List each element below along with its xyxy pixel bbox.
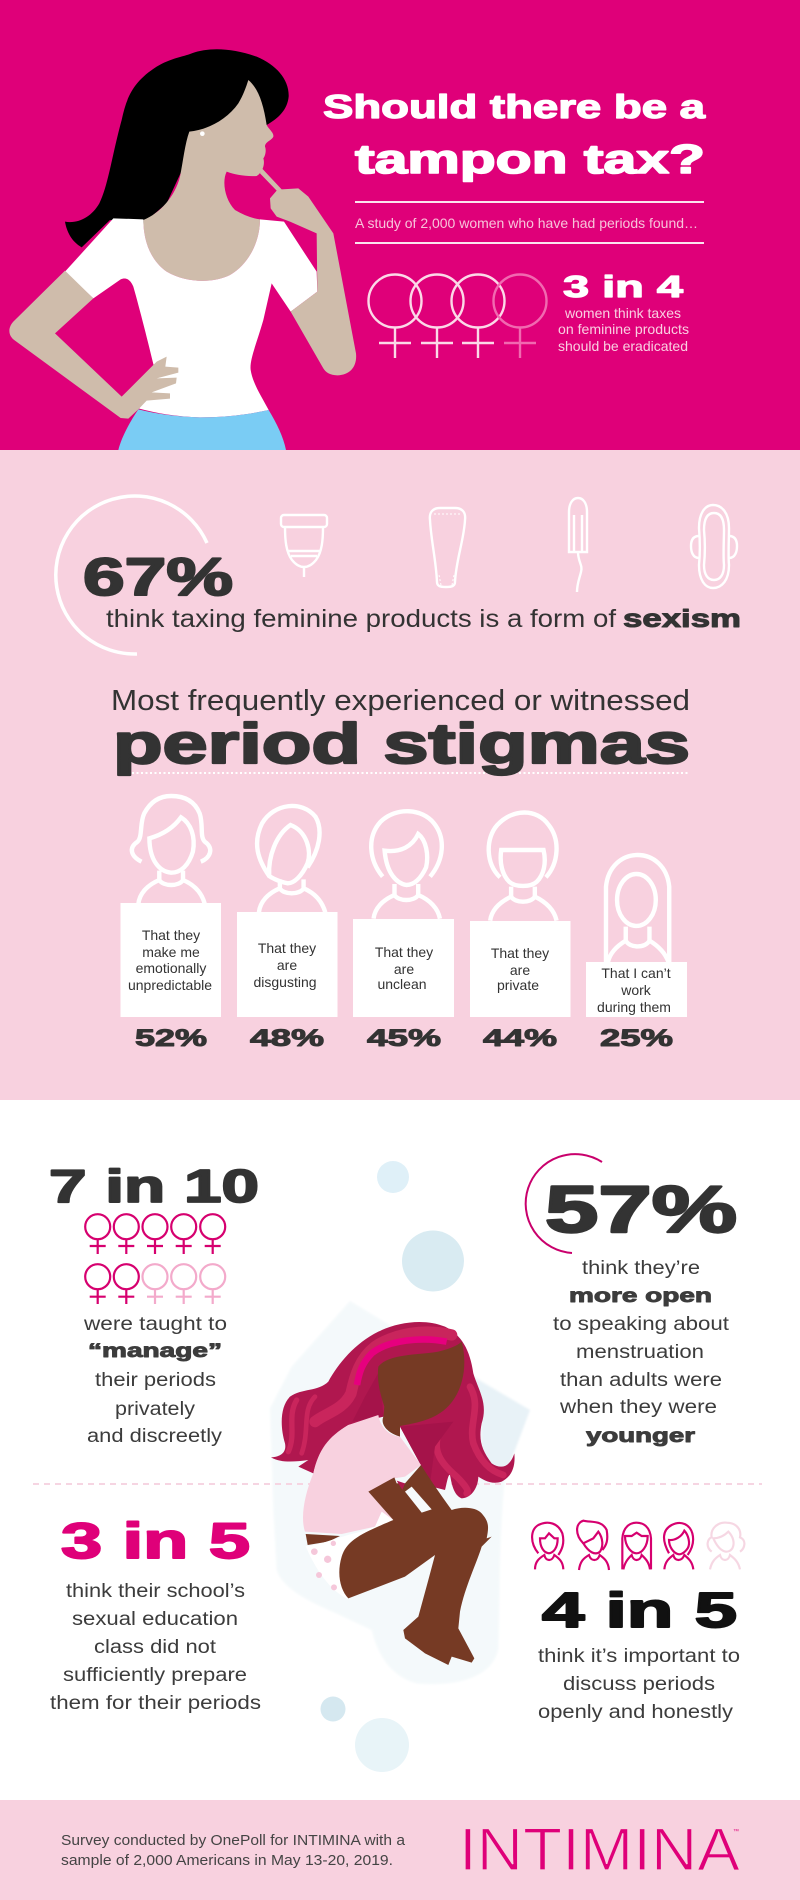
heading: period stigmas: period stigmas	[113, 712, 690, 776]
stat: 3 in 4	[558, 269, 689, 354]
icons: 7 of 10 female symbols	[85, 1214, 225, 1304]
chart: stigma 1, 52 percent: 52%	[135, 1025, 207, 1052]
chart: stigma 4, 44 percent	[470, 812, 570, 1052]
arc around 67 percent	[56, 496, 207, 654]
stat: 7 in 10: 7 in 10	[49, 1160, 259, 1212]
stat: 3 in 4: on feminine products	[558, 321, 689, 337]
chart: stigma 1, 52 percent: unpredictable	[128, 977, 212, 993]
chart: stigma 3, 45 percent: are	[394, 961, 414, 977]
stat: 4 in 5: openly and honestly	[538, 1702, 734, 1723]
illustration: curled up girl	[271, 1322, 515, 1665]
chart: stigma 4, 44 percent: That they	[491, 945, 549, 961]
chart: stigma 3, 45 percent	[353, 811, 454, 1052]
icon: menstrual cup	[281, 515, 327, 577]
panel: stigmas	[0, 450, 800, 1100]
heading: should there be a tampon tax	[323, 88, 706, 182]
chart: stigma 5, 25 percent: That I can’t	[601, 965, 671, 981]
chart: stigma 5, 25 percent: 25%	[600, 1025, 673, 1052]
heading: should there be a tampon tax: Should there be a	[323, 88, 706, 125]
stat: 3 in 5	[50, 1513, 261, 1714]
stat: 57 percent: 57%	[545, 1172, 737, 1246]
chart: stigma 3, 45 percent: That they	[375, 944, 433, 960]
stat: 57 percent: more open	[569, 1286, 712, 1307]
chart: stigma 5, 25 percent	[586, 855, 687, 1052]
stat: 4 in 5	[538, 1584, 740, 1723]
chart: stigma 2, 48 percent: 48%	[250, 1025, 324, 1052]
chart: stigma 2, 48 percent: disgusting	[253, 974, 317, 990]
stat: 3 in 5: sexual education	[72, 1609, 238, 1630]
stat: 3 in 5: sufficiently prepare	[63, 1665, 247, 1686]
stat: 57 percent: younger	[586, 1426, 696, 1447]
stat: 7 in 10: and discreetly	[87, 1426, 223, 1447]
stat: 7 in 10: their periods	[95, 1370, 216, 1391]
text block: survey source	[61, 1832, 406, 1869]
stat: 7 in 10: privately	[115, 1399, 196, 1420]
chart: stigma 1, 52 percent: emotionally	[136, 960, 206, 976]
chart: stigma 1, 52 percent: make me	[142, 944, 200, 960]
text block: survey source: sample of 2,000 Americans in May 13-20, 2019.	[61, 1852, 393, 1869]
chart: stigma 4, 44 percent: are	[510, 962, 530, 978]
icon: soft applicator	[430, 508, 465, 587]
stat: 3 in 4: should be eradicated	[558, 338, 688, 354]
stat: 57 percent: to speaking about	[553, 1314, 730, 1335]
stat: 3 in 5: them for their periods	[50, 1693, 261, 1714]
chart: stigma 3, 45 percent: 45%	[367, 1025, 441, 1052]
stat: 7 in 10: were taught to	[83, 1314, 227, 1335]
text block: study intro: A study of 2,000 women who have had periods found…	[355, 215, 698, 231]
stat: 4 in 5: discuss periods	[563, 1674, 715, 1695]
stat: 57 percent: think they’re	[582, 1258, 700, 1279]
stat: 67 percent	[83, 548, 741, 633]
stat: 4 in 5: think it’s important to	[538, 1646, 740, 1667]
chart: stigma 1, 52 percent	[120, 796, 221, 1052]
chart: stigma 4, 44 percent: 44%	[483, 1025, 557, 1052]
stat: 7 in 10: “manage”	[88, 1341, 222, 1362]
heading: should there be a tampon tax: tampon tax?	[355, 136, 705, 182]
stat: 3 in 4: 3 in 4	[563, 269, 684, 304]
chart: stigma 2, 48 percent: That they	[258, 940, 316, 956]
chart: stigma 5, 25 percent: work	[620, 982, 652, 998]
logo: INTIMINA: ™	[733, 1828, 739, 1835]
panel: footer	[0, 1800, 800, 1900]
panel: attitudes	[0, 1100, 800, 1800]
panel: header	[0, 0, 800, 450]
stat: 67 percent: sexism	[623, 605, 741, 633]
logo: INTIMINA: INTIMINA	[459, 1816, 740, 1883]
stat: 67 percent: 67%	[83, 548, 233, 607]
stat: 57 percent: than adults were	[560, 1370, 722, 1391]
heading: period stigmas: Most frequently experienced or witnessed	[111, 685, 690, 717]
stat: 3 in 5: class did not	[94, 1637, 217, 1658]
heading: period stigmas	[111, 685, 690, 776]
stat: 67 percent: think taxing feminine products is a form of	[106, 605, 616, 633]
stat: 3 in 4: women think taxes	[564, 305, 681, 321]
stat: 3 in 5: think their school’s	[66, 1581, 245, 1602]
stat: 7 in 10	[49, 1160, 259, 1447]
chart: stigma 5, 25 percent: during them	[597, 999, 671, 1015]
icon: sanitary pad	[691, 505, 737, 588]
chart: stigma 2, 48 percent	[237, 806, 338, 1052]
illustration: pillow and bubbles	[270, 1161, 530, 1772]
illustration: woman thinking	[9, 49, 356, 450]
stat: 57 percent: menstruation	[576, 1342, 704, 1363]
icons: 4 of 5 women	[532, 1521, 744, 1570]
chart: stigma 3, 45 percent: unclean	[377, 976, 427, 992]
stat: 3 in 5: 3 in 5	[61, 1513, 250, 1569]
icon: tampon	[569, 498, 587, 592]
text block: survey source: Survey conducted by OnePoll for INTIMINA with a	[61, 1832, 406, 1849]
icons: 3 of 4 female symbols	[368, 274, 546, 358]
chart: stigma 4, 44 percent: private	[497, 977, 539, 993]
stat: 57 percent	[526, 1154, 737, 1447]
stat: 57 percent: when they were	[559, 1397, 717, 1418]
chart: stigma 1, 52 percent: That they	[142, 927, 200, 943]
chart: stigma 2, 48 percent: are	[277, 957, 297, 973]
stat: 4 in 5: 4 in 5	[542, 1584, 737, 1638]
